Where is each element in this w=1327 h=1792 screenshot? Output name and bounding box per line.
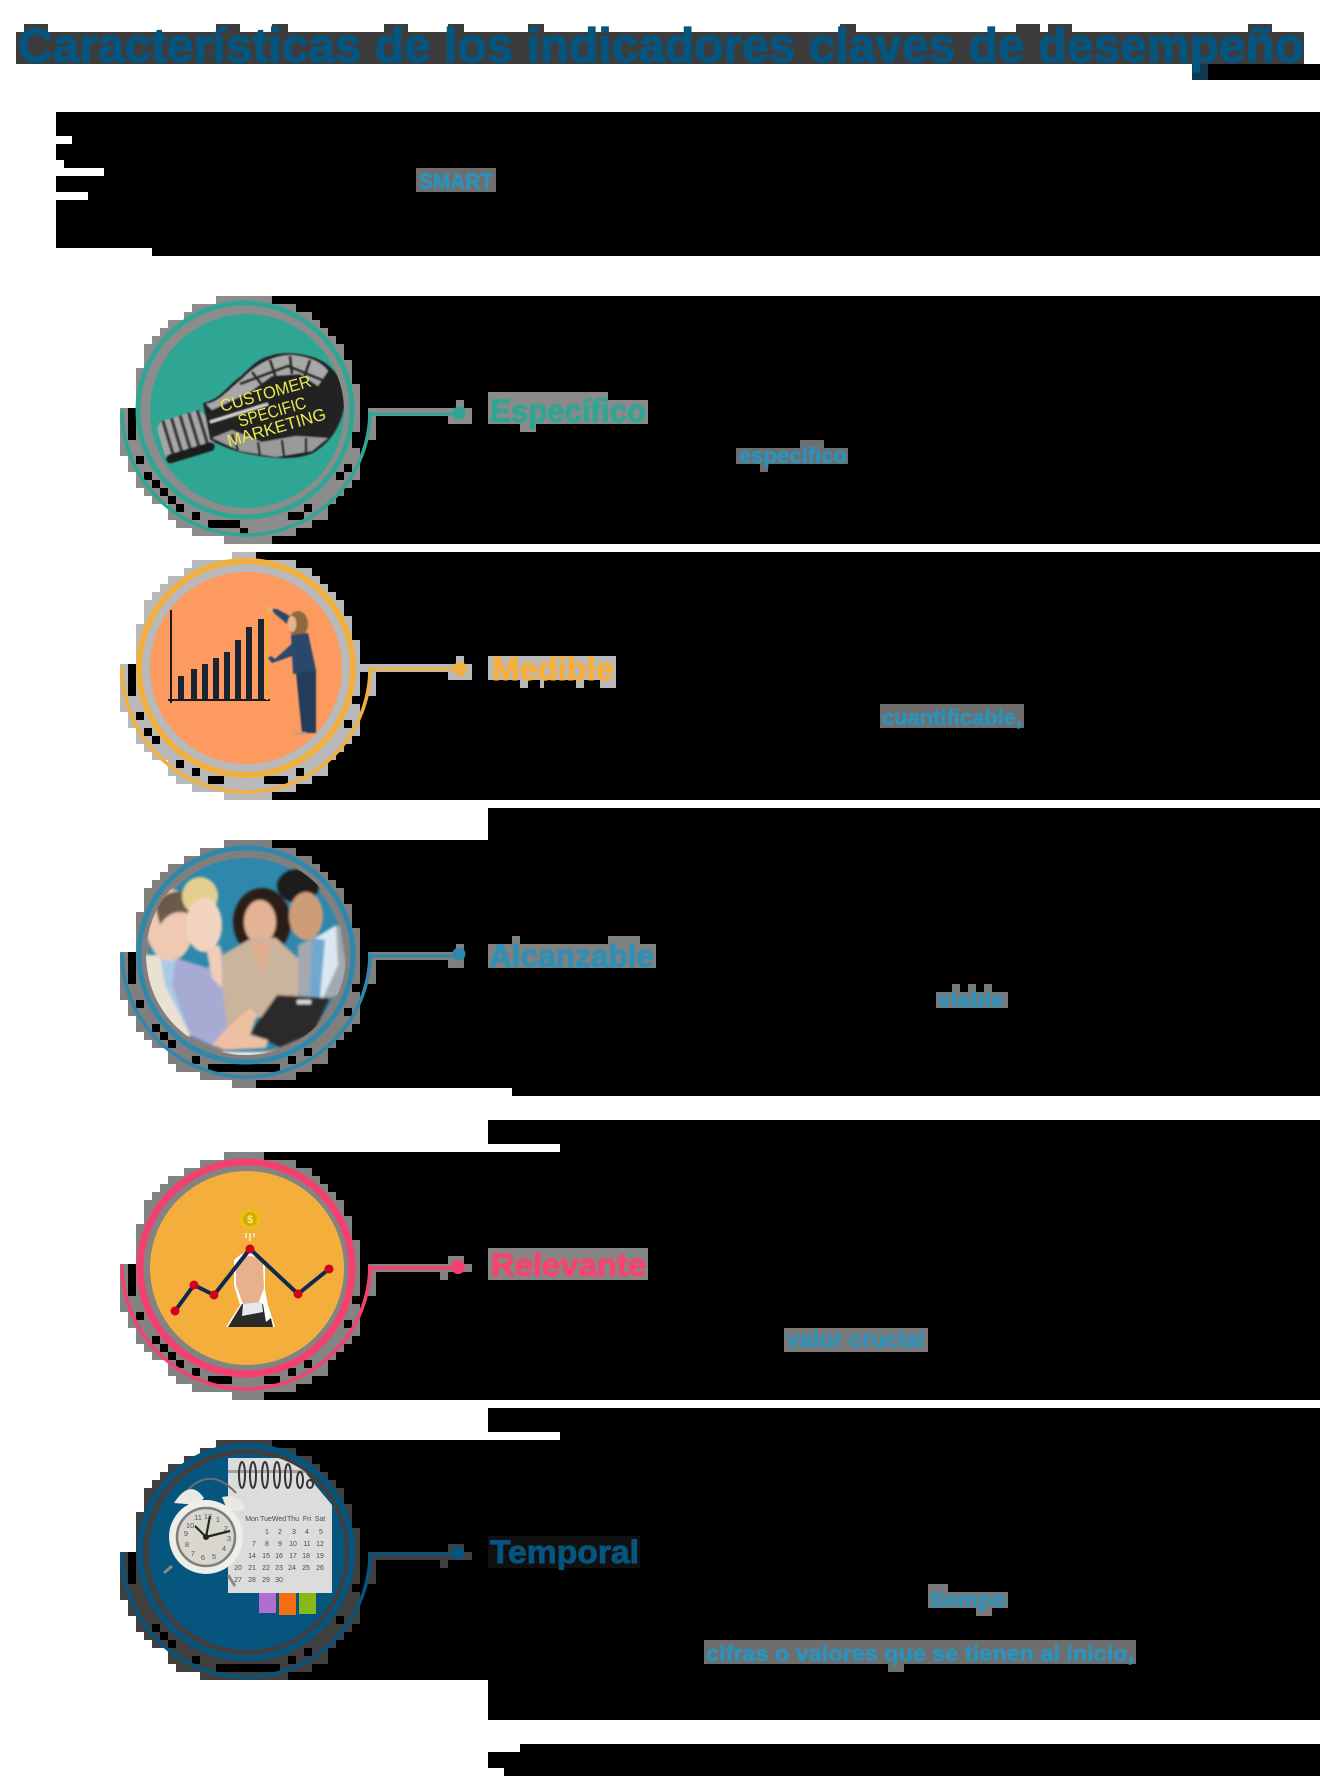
highlighted word: viable: viable xyxy=(938,987,1004,1012)
compression blocks around circle xyxy=(120,840,464,1088)
icon: calendar and alarm clock: 5 xyxy=(319,1529,323,1536)
highlighted word: tiempo: tiempo xyxy=(930,1587,1006,1612)
highlighted words: cifras o valores: cifras o valores que se tienen al inicio, xyxy=(706,1641,1134,1666)
icon: calendar and alarm clock: 23 xyxy=(275,1565,283,1572)
arrow connector xyxy=(369,406,466,420)
compression blocks around circle xyxy=(120,296,472,544)
compression blocks around circle xyxy=(120,1152,472,1400)
icon: calendar and alarm clock: 7 xyxy=(191,1549,195,1558)
arrow connector xyxy=(369,948,466,960)
heading: Alcanzable: Alcanzable xyxy=(489,938,654,974)
icon: calendar and alarm clock: 11 xyxy=(194,1513,202,1522)
compression blocks around circle xyxy=(120,552,472,800)
icon: calendar and alarm clock: 2 xyxy=(224,1524,228,1533)
arrow connector xyxy=(369,662,467,676)
highlighted word: cuantificable: cuantificable, xyxy=(882,705,1022,730)
highlighted word: específico: específico xyxy=(739,443,847,468)
icon: light bulb xyxy=(155,353,345,464)
icon: calendar and alarm clock: 14 xyxy=(248,1553,256,1560)
highlighted word: SMART: SMART xyxy=(419,169,494,194)
icon: calendar and alarm clock: 1 xyxy=(265,1529,269,1536)
icon: line chart with hand and coin: $ xyxy=(247,1214,253,1226)
icon: calendar and alarm clock: 4 xyxy=(222,1544,226,1553)
icon: light bulb: SPECIFIC xyxy=(236,393,308,431)
heading: Específico: Específico xyxy=(490,393,646,429)
icon: calendar and alarm clock: 10 xyxy=(186,1521,194,1530)
icon: calendar and alarm clock: 8 xyxy=(185,1540,189,1549)
icon: calendar and alarm clock: Sat xyxy=(315,1516,325,1523)
arrow connector xyxy=(369,1546,464,1560)
icon: calendar and alarm clock: 11 xyxy=(303,1541,311,1548)
arrow connector xyxy=(369,1260,465,1274)
panel: Alcanzable xyxy=(120,808,1320,1096)
icon: calendar and alarm clock: 7 xyxy=(252,1541,256,1548)
icon: calendar and alarm clock: 19 xyxy=(316,1553,324,1560)
icon: calendar and alarm clock: 3 xyxy=(292,1529,296,1536)
panel: Medible xyxy=(120,552,1320,800)
circle: ring and arc xyxy=(122,561,370,792)
icon: calendar and alarm clock: Tue xyxy=(260,1516,272,1523)
intro text block xyxy=(56,112,1320,256)
title: Características de los indicadores claves de desempeño xyxy=(18,20,1304,73)
icon: calendar and alarm clock: 26 xyxy=(316,1565,324,1572)
panel: Temporal xyxy=(120,1408,1320,1720)
panel: Específico xyxy=(120,296,1320,544)
icon: calendar and alarm clock: 21 xyxy=(248,1565,256,1572)
closing text block xyxy=(488,1744,1320,1776)
icon: calendar and alarm clock: 22 xyxy=(262,1565,270,1572)
icon: light bulb: CUSTOMER xyxy=(218,372,313,416)
icon: calendar and alarm clock: Thu xyxy=(287,1516,299,1523)
icon: calendar and alarm clock: 2 xyxy=(278,1529,282,1536)
icon: calendar and alarm clock: Fri xyxy=(303,1516,312,1523)
circle: ring and arc xyxy=(122,1162,370,1389)
circle: ring and arc xyxy=(122,1446,370,1677)
icon: calendar and alarm clock: 15 xyxy=(262,1553,270,1560)
icon: calendar and alarm clock: 1 xyxy=(216,1515,220,1524)
icon: calendar and alarm clock: Mon xyxy=(245,1516,259,1523)
icon: calendar and alarm clock: 3 xyxy=(227,1534,231,1543)
icon: calendar and alarm clock: 27 xyxy=(234,1577,242,1584)
icon: light bulb: MARKETING xyxy=(225,404,328,451)
icon: calendar and alarm clock: 29 xyxy=(262,1577,270,1584)
heading: Temporal: Temporal xyxy=(490,1534,639,1570)
icon: calendar and alarm clock: 12 xyxy=(316,1541,324,1548)
circle: ring and arc xyxy=(122,848,370,1077)
heading: Relevante: Relevante xyxy=(491,1247,646,1283)
icon: calendar and alarm clock: 17 xyxy=(289,1553,297,1560)
icon: calendar and alarm clock: 10 xyxy=(289,1541,297,1548)
icon: team looking at clipboard xyxy=(144,869,350,1060)
icon: calendar and alarm clock: 25 xyxy=(302,1565,310,1572)
compression blocks around circle xyxy=(120,1440,472,1680)
icon: calendar and alarm clock: 16 xyxy=(275,1553,283,1560)
circle: ring and arc xyxy=(122,303,370,535)
icon: calendar and alarm clock: 24 xyxy=(288,1565,296,1572)
icon: calendar and alarm clock: 28 xyxy=(248,1577,256,1584)
icon: calendar and alarm clock: 6 xyxy=(201,1553,205,1562)
icon: calendar and alarm clock: 9 xyxy=(278,1541,282,1548)
icon: calendar and alarm clock xyxy=(164,1458,332,1615)
icon: line chart with hand and coin xyxy=(170,1209,334,1327)
heading: Medible: Medible xyxy=(492,651,614,687)
icon: calendar and alarm clock: 12 xyxy=(204,1512,212,1521)
icon: calendar and alarm clock: 20 xyxy=(234,1565,242,1572)
panel: Relevante xyxy=(120,1120,1320,1400)
icon: calendar and alarm clock: 9 xyxy=(184,1529,188,1538)
icon: calendar and alarm clock: 5 xyxy=(212,1552,216,1561)
icon: calendar and alarm clock: Wed xyxy=(272,1516,286,1523)
icon: calendar and alarm clock: 30 xyxy=(275,1577,283,1584)
icon: calendar and alarm clock: 4 xyxy=(305,1529,309,1536)
icon: bar chart with woman xyxy=(168,607,320,735)
icon: calendar and alarm clock: 8 xyxy=(265,1541,269,1548)
icon: calendar and alarm clock: 18 xyxy=(302,1553,310,1560)
highlighted words: valor crucial: valor crucial xyxy=(787,1327,924,1352)
